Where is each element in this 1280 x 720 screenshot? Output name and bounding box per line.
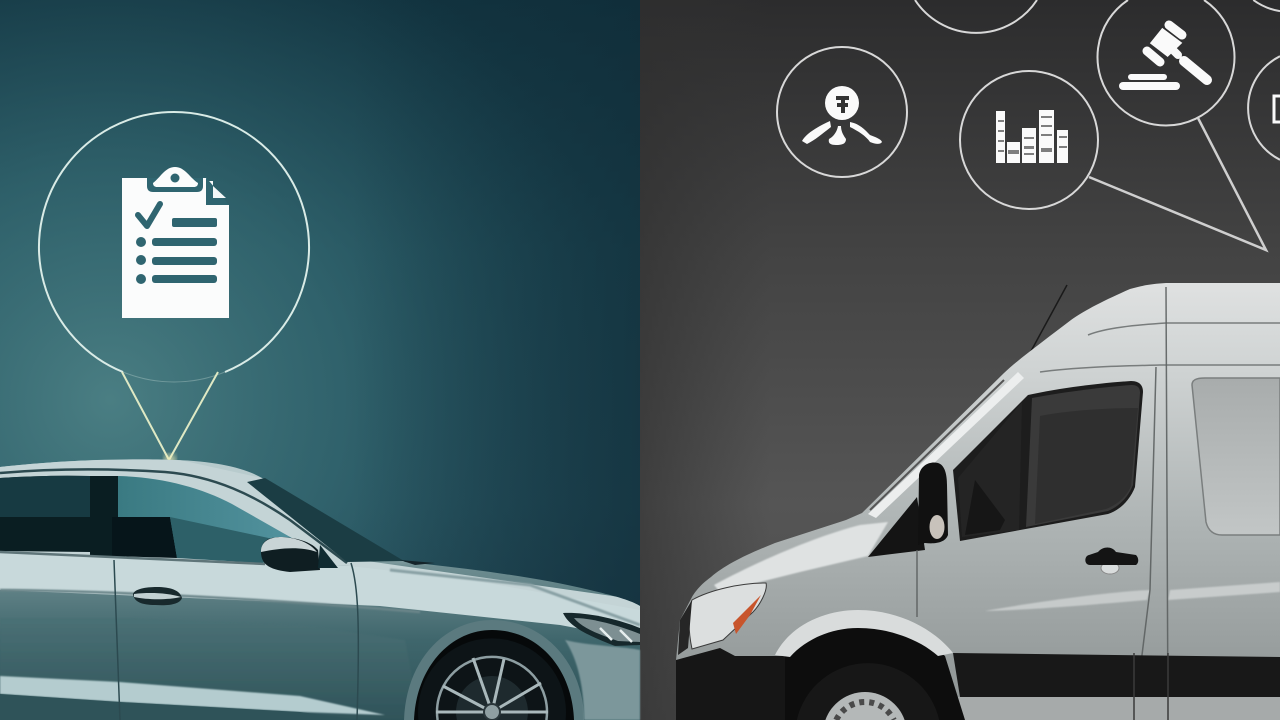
van lower side highlight	[985, 590, 1150, 611]
car door lines	[114, 560, 358, 720]
callout: partial top-right bubble	[1253, 0, 1280, 11]
car windshield	[247, 478, 404, 562]
callout: partial right bubble	[1248, 56, 1280, 160]
car wheel	[404, 620, 584, 720]
car pillar	[90, 476, 125, 557]
van door lines	[917, 287, 1168, 720]
panel: right grey background	[640, 0, 1280, 720]
van door handle	[1085, 548, 1138, 574]
van headlight	[678, 583, 766, 655]
car side mirror	[261, 537, 338, 572]
van hood highlight	[714, 522, 888, 592]
van cab windows	[868, 381, 1143, 557]
van side mirror	[918, 462, 948, 545]
panel: left teal background	[0, 0, 640, 720]
icon: gavel	[1123, 25, 1207, 86]
callout: gavel bubble	[1098, 0, 1235, 125]
icon: bar chart	[996, 110, 1068, 163]
car door handle	[133, 587, 182, 605]
van antenna	[1030, 285, 1067, 353]
callout: user network bubble	[777, 47, 907, 177]
van body	[676, 283, 1280, 720]
van wheel	[775, 610, 965, 720]
icon: clipboard checklist	[122, 167, 229, 318]
car beltline	[0, 552, 265, 564]
car front bumper	[565, 640, 640, 720]
callout: clipboard bubble on car	[39, 112, 309, 466]
van roof crease	[1040, 323, 1280, 372]
car rear window	[0, 476, 90, 552]
van front bumper	[676, 648, 795, 720]
car front window	[118, 476, 306, 563]
icon: network nodes	[802, 86, 882, 145]
arrow: pointer lines to van	[1089, 118, 1266, 250]
callout: partial top bubble	[915, 0, 1037, 33]
van lower black trim	[953, 653, 1280, 697]
callout: bar chart bubble	[960, 71, 1098, 209]
car: silver sedan	[0, 455, 640, 720]
van cargo window panel	[1192, 378, 1280, 535]
car headlight	[563, 613, 640, 646]
car body	[0, 455, 640, 720]
van: white high-roof van	[676, 283, 1280, 720]
van windshield strip	[868, 372, 1024, 518]
